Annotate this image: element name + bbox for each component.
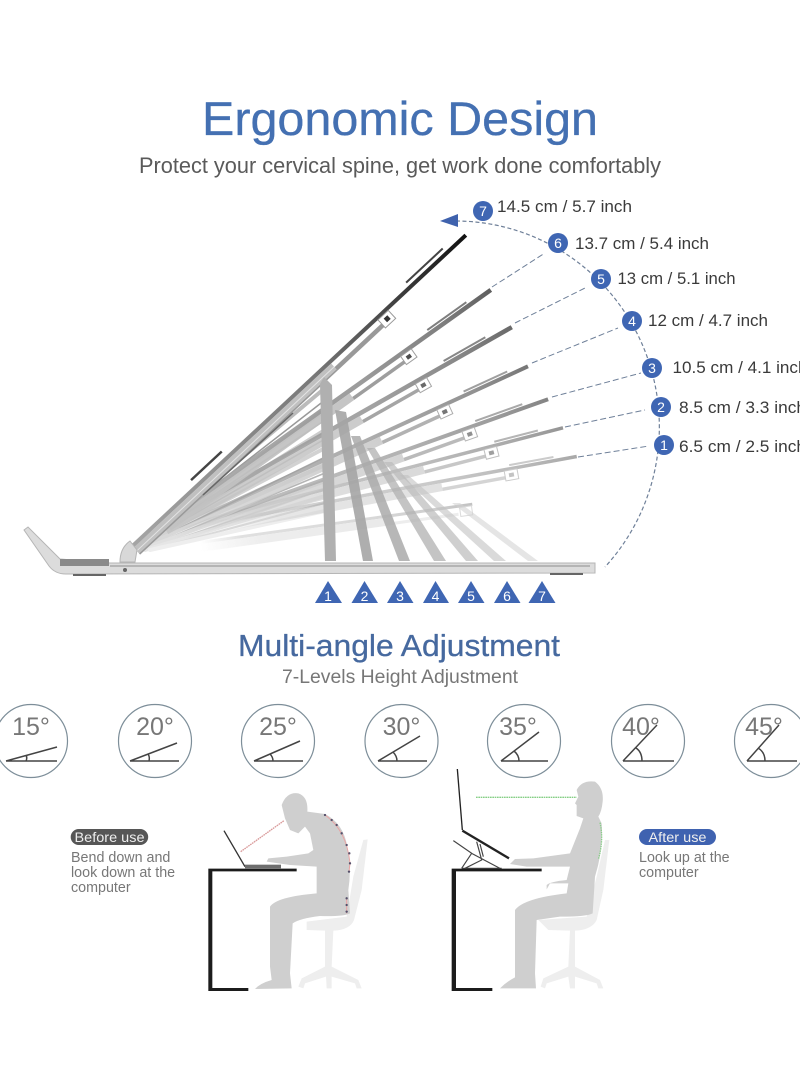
- scene: after use: [452, 769, 609, 991]
- support leg 4: [367, 448, 446, 561]
- base centre line: [110, 565, 590, 567]
- after use text: computer: [639, 865, 699, 881]
- rubber pad left: [60, 559, 109, 566]
- hinge screw: [123, 568, 127, 572]
- before use badge: Before use: [74, 830, 144, 845]
- leg position triangles: 5: [467, 588, 475, 604]
- curved spine: [325, 815, 350, 913]
- fan of overlapping panel shadows: [132, 388, 325, 550]
- height label 6: 6: [554, 235, 562, 251]
- before use text: look down at the: [71, 865, 175, 881]
- angle icon 40: [612, 704, 684, 778]
- hinge: [120, 541, 137, 562]
- angle icon 25: 25°: [259, 713, 297, 741]
- section subheading: 7-Levels Height Adjustment: [282, 667, 519, 688]
- height label 7: 7: [479, 203, 487, 219]
- after use text: Look up at the: [639, 850, 730, 866]
- height label 3: 3: [648, 360, 656, 376]
- height label 7: 14.5 cm / 5.7 inch: [497, 198, 632, 216]
- leg position triangles: 6: [503, 588, 511, 604]
- title: Ergonomic Design: [202, 92, 598, 145]
- height label 1: 1: [660, 437, 668, 453]
- stand panel position 3: [178, 394, 552, 542]
- scene: before use: [208, 793, 368, 991]
- after use text: [639, 850, 730, 881]
- office chair before: [298, 839, 368, 988]
- height label 4: 12 cm / 4.7 inch: [648, 312, 768, 330]
- subtitle: Protect your cervical spine, get work done comfortably: [139, 153, 661, 178]
- before use text: [71, 850, 175, 896]
- stand side view: [453, 841, 502, 868]
- before use text: computer: [71, 880, 131, 896]
- downward sight line: [241, 821, 284, 852]
- stand base: [24, 527, 595, 574]
- person upright: [500, 781, 603, 988]
- angle icon 30: 30°: [383, 713, 420, 741]
- stand panel position 2: [199, 423, 566, 533]
- support leg 3: [351, 436, 410, 561]
- height label 4: 4: [628, 313, 636, 329]
- foot right: [550, 573, 583, 575]
- support leg 7: [452, 503, 538, 561]
- angle icon 20: 20°: [136, 713, 174, 741]
- before use text: Bend down and: [71, 850, 170, 866]
- leg position triangles: 4: [432, 588, 440, 604]
- level sight line: [476, 795, 577, 799]
- section heading: Multi-angle Adjustment: [238, 629, 561, 663]
- spine dots: [324, 814, 351, 913]
- raised laptop screen: [457, 769, 462, 830]
- angle icon 45: 45°: [745, 713, 783, 741]
- angle icon 20: [118, 704, 192, 778]
- support leg 6: [400, 475, 506, 561]
- height label 7: [473, 198, 632, 221]
- angle icon 45: [734, 704, 800, 778]
- dashed guide lines: [492, 253, 649, 457]
- laptop flat: [224, 831, 245, 867]
- support leg 1: [320, 377, 336, 561]
- office chair after: [538, 840, 609, 988]
- height label 2: 2: [657, 399, 665, 415]
- angle icon 35: 35°: [499, 713, 537, 741]
- height label 6: 13.7 cm / 5.4 inch: [575, 235, 709, 253]
- raised laptop on stand: [462, 831, 509, 858]
- desk: [452, 869, 542, 991]
- stand panel position 1: [204, 452, 579, 536]
- foot left: [73, 574, 106, 576]
- leg position triangles: 3: [396, 588, 404, 604]
- stand panel position faint: [200, 503, 474, 553]
- support leg 2: [335, 410, 373, 561]
- dashed arc with arrow: [440, 214, 659, 567]
- after use badge: After use: [648, 830, 706, 845]
- stand panel position 4: [168, 362, 533, 541]
- angle icon 15: 15°: [12, 713, 50, 741]
- angle icon 25: [242, 704, 314, 778]
- height label 1: 6.5 cm / 2.5 inch: [679, 438, 800, 456]
- leg position triangles: 7: [538, 588, 546, 604]
- stand panel position 7: [126, 228, 475, 556]
- angle icon 15: [0, 704, 68, 778]
- desk: [208, 869, 297, 991]
- person bent forward: [255, 793, 350, 989]
- angle icon 40: 40°: [622, 713, 660, 741]
- leg position triangles: [315, 581, 556, 604]
- stand panel position 5: [161, 323, 518, 535]
- leg position triangles: 2: [361, 588, 369, 604]
- detail stroke on panel 6: [203, 413, 293, 495]
- angle icon 30: [365, 704, 438, 778]
- leg position triangles: 1: [324, 588, 332, 604]
- stand panel position 6: [162, 286, 498, 532]
- height label 5: 5: [597, 271, 605, 287]
- laptop stand diagram: [24, 228, 595, 576]
- after use badge: [639, 829, 716, 845]
- support leg 5: [384, 462, 478, 561]
- laptop keyboard: [245, 865, 281, 868]
- straight spine: [598, 823, 602, 859]
- angle icon 35: [488, 704, 560, 778]
- height label 5: 13 cm / 5.1 inch: [618, 270, 736, 288]
- height label 3: 10.5 cm / 4.1 inch: [672, 359, 800, 377]
- height label 2: 8.5 cm / 3.3 inch: [679, 399, 800, 417]
